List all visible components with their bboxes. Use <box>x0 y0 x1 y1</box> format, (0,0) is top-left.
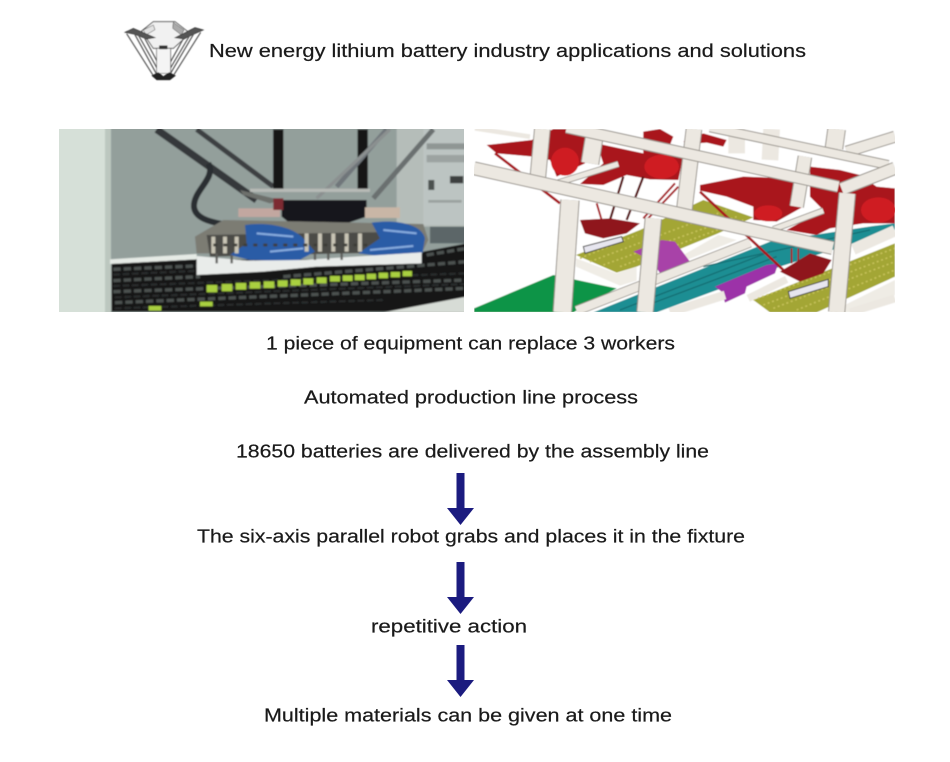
battery bundle, blue wrap <box>230 224 315 262</box>
diagram: 3D model of parallel robots over the assembly line <box>473 127 897 315</box>
white strip bottom right <box>383 297 467 312</box>
gripper carriage <box>195 220 428 253</box>
text: step two: The six-axis parallel robot grabs and places it in the fixture <box>197 526 745 546</box>
white base <box>197 252 422 275</box>
wall background <box>110 129 464 312</box>
text: equipment replaces workers: 1 piece of equipment can replace 3 workers <box>266 334 675 354</box>
text: process heading: Automated production line process <box>304 388 638 408</box>
arrow: step three to step four <box>447 645 474 697</box>
green floor <box>474 275 617 312</box>
teal conveyor <box>593 223 895 312</box>
arrow: step two to step three <box>447 562 474 614</box>
conveyor <box>112 243 467 312</box>
red robot arms <box>495 153 798 270</box>
white ledge <box>110 254 197 264</box>
equipment cabinet <box>423 128 467 243</box>
photo: delta robot gripping batteries on a production line <box>57 127 467 317</box>
rods <box>157 129 433 200</box>
text: step one: 18650 batteries are delivered by the assembly line <box>236 442 709 462</box>
text: step four: Multiple materials can be given at one time <box>264 706 672 726</box>
red robot bodies <box>487 129 896 235</box>
cable <box>194 163 222 224</box>
title: New energy lithium battery industry applications and solutions <box>209 41 806 61</box>
purple guides <box>633 239 690 274</box>
pale left column <box>57 127 107 317</box>
text: step three: repetitive action <box>371 616 527 636</box>
mechanical pins <box>213 233 360 253</box>
light wall section on right <box>397 127 467 227</box>
arrow: step one to step two <box>447 473 474 525</box>
gripper block <box>238 189 400 223</box>
gripper plates <box>583 237 623 253</box>
robot heads <box>580 218 640 238</box>
green battery tops <box>149 271 412 311</box>
steel frame columns and beams <box>474 127 895 312</box>
icon: delta parallel robot logo <box>125 22 203 80</box>
olive trays <box>576 200 895 312</box>
conveyor rails <box>577 231 895 312</box>
